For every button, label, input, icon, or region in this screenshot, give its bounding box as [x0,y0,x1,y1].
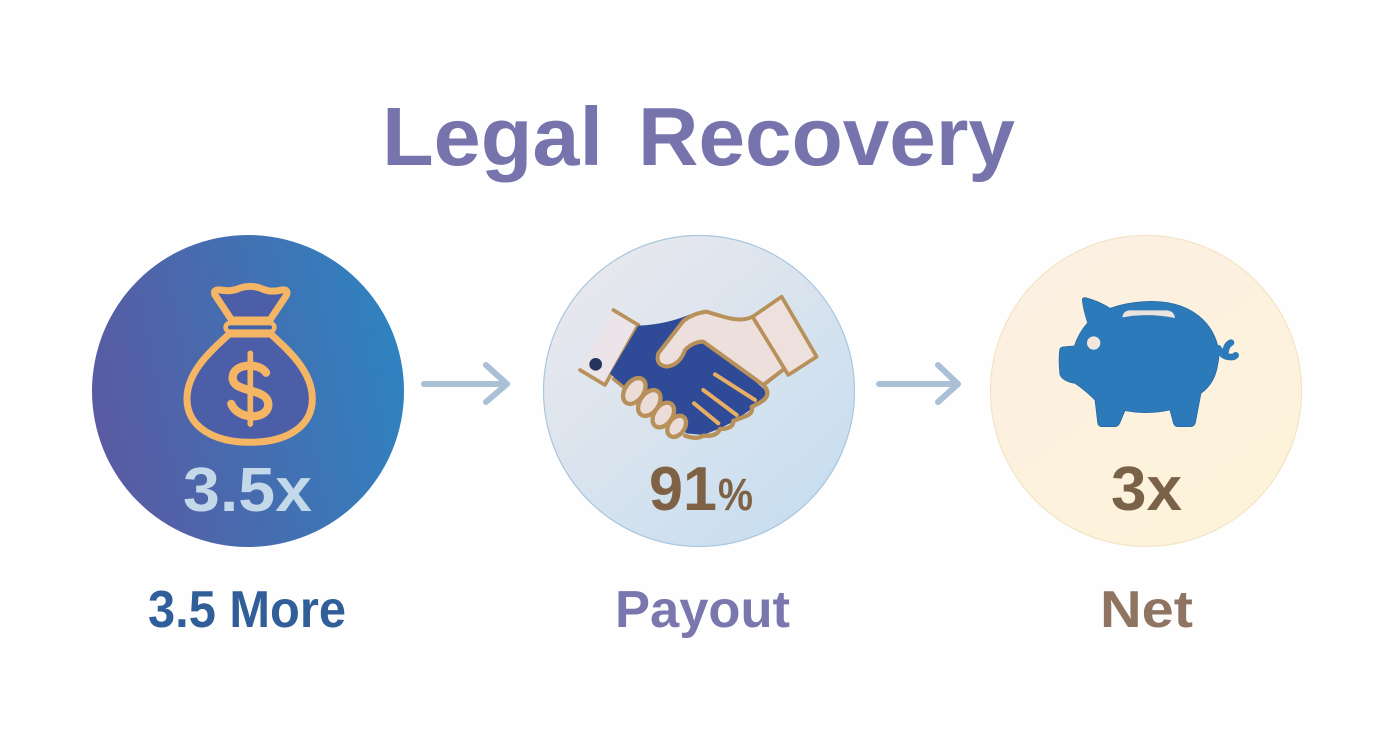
title: Recovery [638,90,1015,183]
label: 3.5 More: 3.5 More [148,581,346,639]
icon: dollar sign [231,353,268,424]
label: Net: Net [1100,581,1193,639]
finger lines [694,374,755,423]
title: Legal [382,90,603,183]
panel: 3.5x circle [92,235,404,547]
value: 91%: % [718,469,753,520]
panel: 91% circle [544,236,854,546]
panel: 3x circle [990,236,1302,546]
icon: handshake [580,297,817,440]
icon: money bag [187,286,312,442]
knuckles [618,374,690,440]
value: 3.5x: 3.5x [183,456,313,525]
icon: piggy bank [1059,298,1236,427]
arrow: first [424,365,507,402]
right fingertips [685,386,767,438]
label: Payout: Payout [615,581,790,639]
left cuff [580,310,638,385]
value: 91%: 91 [649,455,717,524]
right hand [658,312,785,385]
arrow: second [879,365,958,402]
left wrist line [613,379,623,387]
value: 3x: 3x [1111,455,1183,524]
blue hand [610,314,766,435]
right cuff [753,297,817,375]
title [382,90,1015,183]
value: 91% [649,455,753,524]
